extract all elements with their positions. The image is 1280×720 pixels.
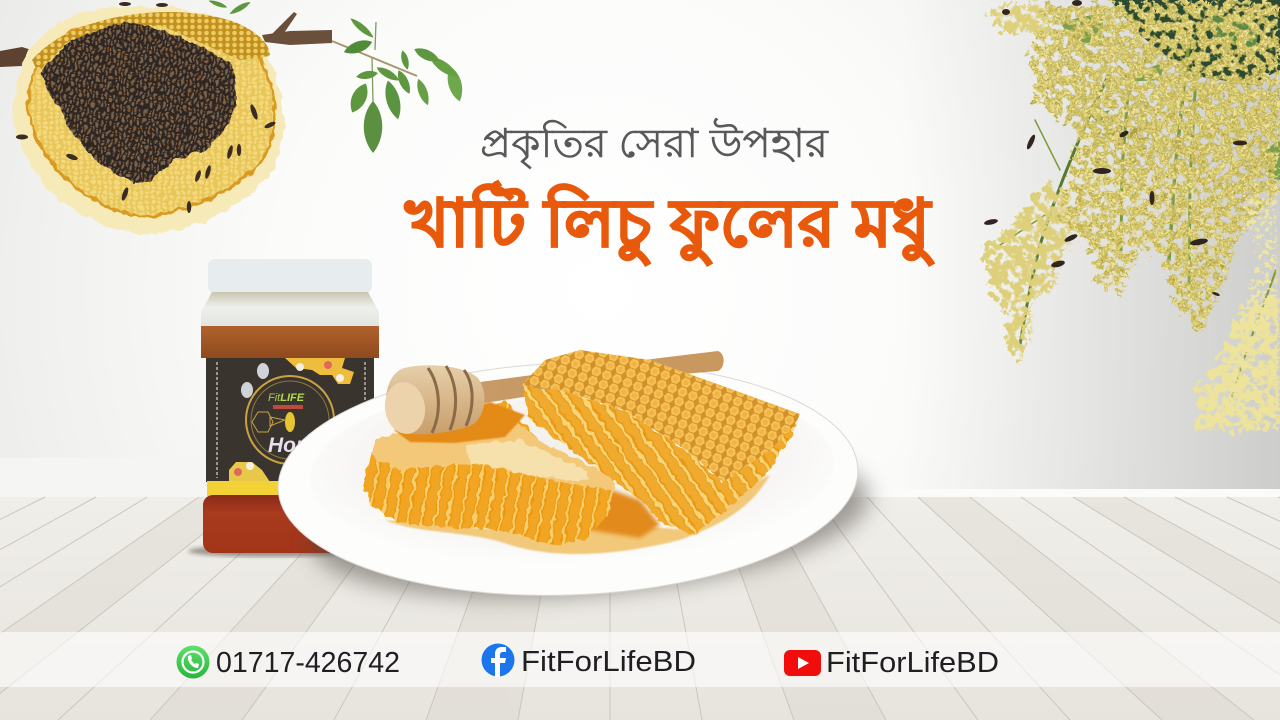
title: খাটি লিচু ফুলের মধু — [404, 180, 935, 266]
right comb top — [522, 350, 800, 482]
phone number: 01717-426742 — [216, 647, 400, 679]
whatsapp contact — [176, 646, 400, 679]
honey pool dark — [590, 490, 660, 538]
jar label — [206, 358, 374, 482]
honeycomb right — [522, 350, 800, 535]
hive top comb — [32, 12, 270, 72]
stems — [1000, 40, 1276, 410]
honey jar — [188, 259, 379, 557]
jar glass top — [201, 292, 379, 330]
jar yellow band — [207, 481, 373, 496]
plate shadow — [305, 422, 875, 618]
facebook handle: FitForLifeBD — [521, 646, 696, 678]
jar honey upper — [201, 326, 379, 358]
jar shadow — [188, 545, 352, 557]
bar background — [0, 632, 1280, 687]
lower right sprays — [1240, 190, 1280, 330]
right spray blooms — [1145, 100, 1280, 335]
blossom branches — [982, 0, 1280, 430]
honeycomb with bee swarm — [0, 2, 283, 234]
skirting strip — [0, 458, 1280, 498]
green leaves — [1060, 12, 1280, 180]
top left sprig — [982, 0, 1050, 35]
wooden floor — [0, 497, 1280, 720]
stray bees — [16, 2, 276, 213]
left comb crystallised wax — [465, 440, 590, 482]
honey puddle — [385, 475, 770, 554]
upper blooms — [1030, 0, 1280, 135]
youtube contact — [784, 647, 999, 679]
subtitle: প্রকৃতির সেরা উপহার — [480, 118, 829, 169]
left comb honey — [394, 402, 525, 443]
middle spray blooms — [1060, 130, 1152, 295]
lowest right spray — [1195, 290, 1280, 430]
plate well — [307, 367, 837, 573]
right comb side — [522, 385, 797, 535]
jar base — [203, 495, 375, 553]
jar lid — [208, 259, 372, 293]
dipper head — [382, 365, 484, 437]
branch right — [262, 12, 417, 102]
dark foliage — [1110, 0, 1280, 85]
jar label: Hon — [268, 434, 309, 457]
hive inner comb — [28, 21, 275, 217]
left long spray blooms — [982, 185, 1075, 365]
dipper handle — [480, 351, 724, 403]
hive outer wax — [13, 7, 283, 234]
plate — [274, 353, 875, 618]
icon: whatsapp — [176, 646, 210, 678]
wall background — [0, 0, 1280, 500]
dense flower shade — [1045, 0, 1280, 205]
plate body — [274, 353, 862, 605]
facebook contact — [482, 644, 696, 678]
youtube handle: FitForLifeBD — [826, 647, 999, 679]
branch left — [0, 47, 40, 67]
flying bees — [984, 0, 1247, 297]
contact bar — [0, 632, 1280, 687]
left comb body — [363, 400, 615, 545]
jar label: FitLIFE — [268, 392, 305, 404]
honeycomb left — [363, 400, 615, 545]
icon: facebook — [482, 644, 514, 677]
branch leaves — [208, 0, 466, 153]
icon: youtube — [784, 650, 821, 676]
bee swarm — [40, 22, 238, 184]
left comb top — [370, 410, 615, 490]
